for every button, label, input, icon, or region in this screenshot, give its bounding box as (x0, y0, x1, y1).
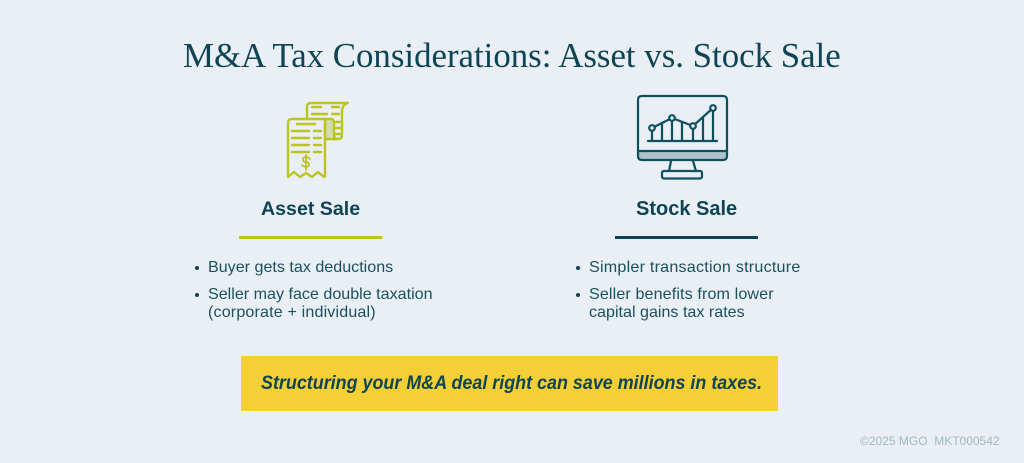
bullet list: asset sale (195, 258, 433, 321)
panel: asset sale (195, 102, 433, 321)
heading: stock sale: Stock Sale (636, 198, 737, 220)
bullet list: stock sale (576, 258, 800, 321)
icon: receipts (286, 102, 350, 178)
copyright: ©2025 MGO MKT000542 (860, 434, 1000, 448)
divider: asset sale (239, 236, 382, 239)
bullet list: stock sale: Seller benefits from lower (589, 285, 774, 303)
bullet list: stock sale: Simpler transaction structure (589, 258, 800, 276)
callout text: Structuring your M&A deal right can save millions in taxes. (261, 373, 762, 394)
bullet list: asset sale: Seller may face double taxation (208, 285, 433, 303)
panel: stock sale (576, 94, 800, 321)
bullet list: asset sale: (corporate + individual) (208, 303, 376, 321)
bullet list: stock sale: capital gains tax rates (589, 303, 745, 321)
bullet list: asset sale: Buyer gets tax deductions (208, 258, 393, 276)
divider: stock sale (615, 236, 758, 239)
icon: monitor with line chart (636, 94, 728, 180)
callout (241, 356, 778, 411)
title: M&A Tax Considerations: Asset vs. Stock Sale (183, 36, 841, 75)
heading: asset sale: Asset Sale (261, 198, 360, 220)
